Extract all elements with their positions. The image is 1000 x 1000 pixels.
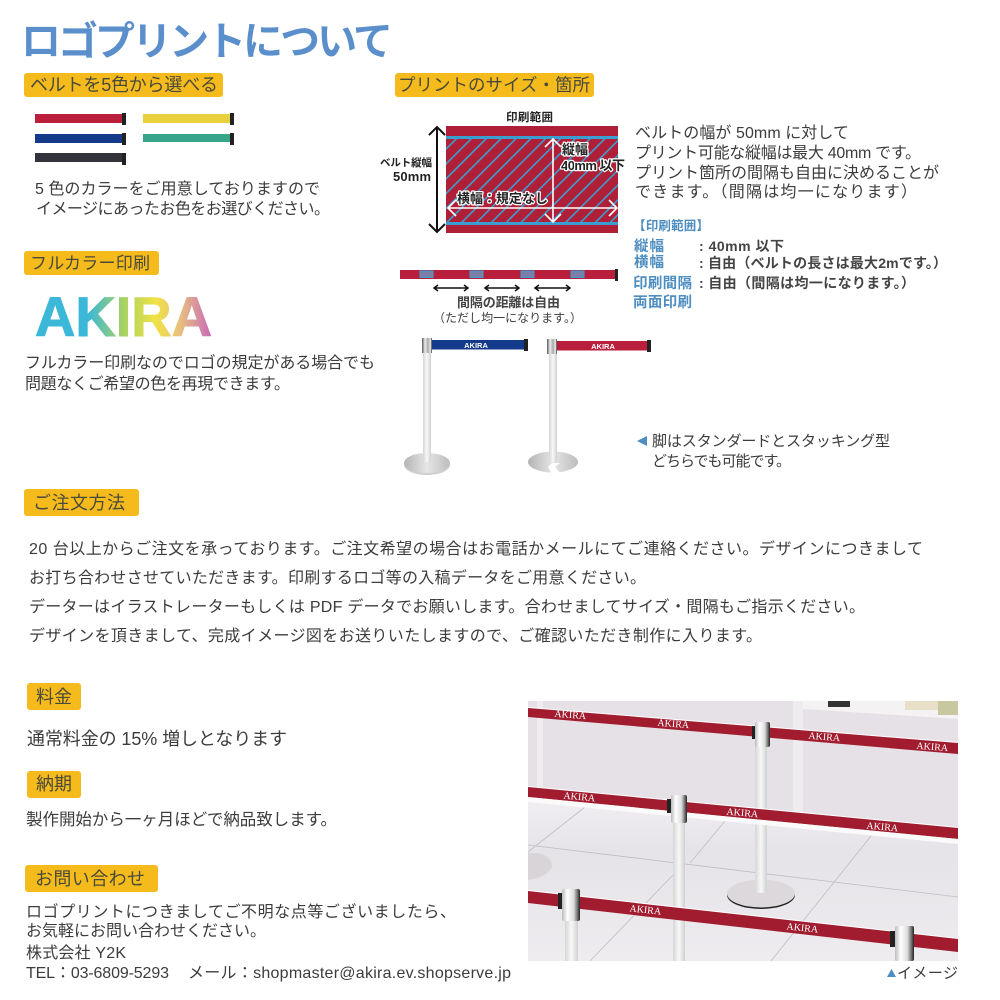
order instructions: お打ち合わせさせていただきます。印刷するロゴ等の入稿データをご用意ください。 bbox=[29, 568, 646, 587]
contact text: ロゴプリントにつきましてご不明な点等ございましたら、 bbox=[26, 902, 456, 921]
contact text: TEL：03-6809-5293 bbox=[26, 965, 169, 982]
print area diagram: 50mm bbox=[393, 169, 431, 184]
price text: 通常料金の 15% 増しとなります bbox=[27, 729, 287, 749]
print area diagram: 縦幅 bbox=[562, 142, 588, 157]
print range specification: : 自由（ベルトの長さは最大2mです。） bbox=[699, 255, 947, 271]
full colour description: フルカラー印刷なのでロゴの規定がある場合でも bbox=[25, 353, 375, 372]
photo: stanchions with printed belts: AKIRA bbox=[554, 709, 587, 722]
stanchion: standard base, blue belt: AKIRA bbox=[464, 341, 488, 350]
photo caption: イメージ bbox=[897, 965, 958, 982]
heading: price: 料金 bbox=[36, 687, 72, 707]
contact text: お気軽にお問い合わせください。 bbox=[26, 922, 266, 940]
order instructions: デザインを頂きまして、完成イメージ図をお送りいたしますので、ご確認いただき制作に入ります。 bbox=[29, 626, 762, 645]
print range specification: : 自由（間隔は均一になります。） bbox=[699, 275, 915, 291]
print size description: ベルトの幅が 50mm に対して bbox=[635, 124, 849, 142]
interval caption: 間隔の距離は自由 bbox=[457, 295, 560, 310]
order instructions bbox=[29, 539, 923, 645]
base type note: 脚はスタンダードとスタッキング型 bbox=[652, 433, 890, 450]
print size description bbox=[635, 124, 939, 201]
lead time text: 製作開始から一ヶ月ほどで納品致します。 bbox=[26, 810, 337, 829]
panel: print size and position bbox=[380, 73, 625, 325]
photo: stanchions with printed belts: AKIRA bbox=[866, 821, 899, 834]
photo: stanchions with printed belts: AKIRA bbox=[657, 718, 690, 731]
heading: lead time bbox=[27, 771, 81, 798]
photo: stanchions with printed belts: AKIRA bbox=[563, 791, 596, 804]
full colour description: 問題なくご希望の色を再現できます。 bbox=[25, 375, 290, 393]
panel: price bbox=[27, 683, 287, 749]
order instructions: 20 台以上からご注文を承っております。ご注文希望の場合はお電話かメールにてご連絡ください。デザインにつきまして bbox=[29, 539, 923, 558]
interval caption bbox=[433, 295, 582, 325]
heading: how to order bbox=[24, 489, 139, 516]
print range specification: 縦幅 bbox=[634, 238, 664, 255]
heading: how to order: ご注文方法 bbox=[33, 493, 125, 513]
print area diagram: ベルト縦幅 bbox=[380, 156, 432, 169]
contact text bbox=[26, 902, 511, 982]
stanchion: stacking base, red belt: AKIRA bbox=[591, 342, 615, 351]
photo: stanchions with printed belts: AKIRA bbox=[786, 921, 819, 936]
heading: belt colours: ベルトを5色から選べる bbox=[30, 75, 218, 95]
belt colours description: 5 色のカラーをご用意しておりますので bbox=[35, 180, 320, 198]
rainbow AKIRA logo: AKIRA bbox=[35, 285, 212, 348]
heading: price bbox=[27, 683, 81, 710]
interval caption: （ただし均一になります。） bbox=[433, 311, 582, 325]
stanchion: standard base, blue belt bbox=[404, 338, 528, 475]
print area diagram: 印刷範囲 bbox=[506, 110, 553, 124]
interval arrows bbox=[434, 285, 570, 291]
heading: print size: プリントのサイズ・箇所 bbox=[398, 75, 590, 95]
belt swatches bbox=[35, 113, 234, 165]
print range specification: 印刷間隔 bbox=[633, 275, 692, 292]
photo: stanchions with printed belts: AKIRA bbox=[808, 731, 841, 744]
panel: belt colours bbox=[24, 73, 330, 218]
heading: lead time: 納期 bbox=[36, 774, 72, 794]
order instructions: データーはイラストレーターもしくは PDF データでお願いします。合わせましてサイズ・間隔もご指示ください。 bbox=[29, 597, 865, 616]
print size description: プリント可能な縦幅は最大 40mm です。 bbox=[635, 144, 921, 162]
photo: stanchions with printed belts: AKIRA bbox=[726, 807, 759, 820]
belt colours description: イメージにあったお色をお選びください。 bbox=[36, 200, 330, 218]
print size description: できます。（間隔は均一になります） bbox=[635, 183, 917, 201]
contact text: 株式会社 Y2K bbox=[26, 944, 126, 962]
print range specification: : 40mm 以下 bbox=[699, 238, 784, 254]
print range specification bbox=[633, 218, 947, 311]
photo: stanchions with printed belts bbox=[528, 701, 958, 961]
print range specification: 横幅 bbox=[634, 254, 664, 271]
heading: contact bbox=[25, 865, 158, 892]
panel: contact bbox=[25, 865, 511, 982]
heading: full colour: フルカラー印刷 bbox=[30, 254, 150, 273]
print area diagram: 横幅：規定なし bbox=[457, 191, 548, 206]
stanchion: stacking base, red belt bbox=[528, 339, 651, 474]
print range specification: 両面印刷 bbox=[633, 294, 692, 311]
belt strip with repeated prints bbox=[400, 269, 618, 281]
panel: lead time bbox=[26, 771, 337, 829]
contact text: メール：shopmaster@akira.ev.shopserve.jp bbox=[188, 965, 511, 982]
photo: stanchions with printed belts: AKIRA bbox=[629, 903, 662, 918]
panel: full colour print bbox=[24, 251, 375, 393]
title: ロゴプリントについて bbox=[21, 20, 393, 64]
print area diagram bbox=[380, 110, 625, 233]
print size description: プリント箇所の間隔も自由に決めることが bbox=[635, 164, 939, 182]
base type note: どちらでも可能です。 bbox=[652, 453, 791, 470]
belt colours description bbox=[35, 180, 330, 218]
base type note bbox=[637, 433, 890, 470]
heading: contact: お問い合わせ bbox=[35, 869, 145, 889]
print range specification: 【印刷範囲】 bbox=[633, 218, 709, 233]
print area diagram: 40mm 以下 bbox=[561, 158, 625, 173]
full colour description bbox=[25, 353, 375, 393]
photo: stanchions with printed belts: AKIRA bbox=[916, 741, 949, 754]
